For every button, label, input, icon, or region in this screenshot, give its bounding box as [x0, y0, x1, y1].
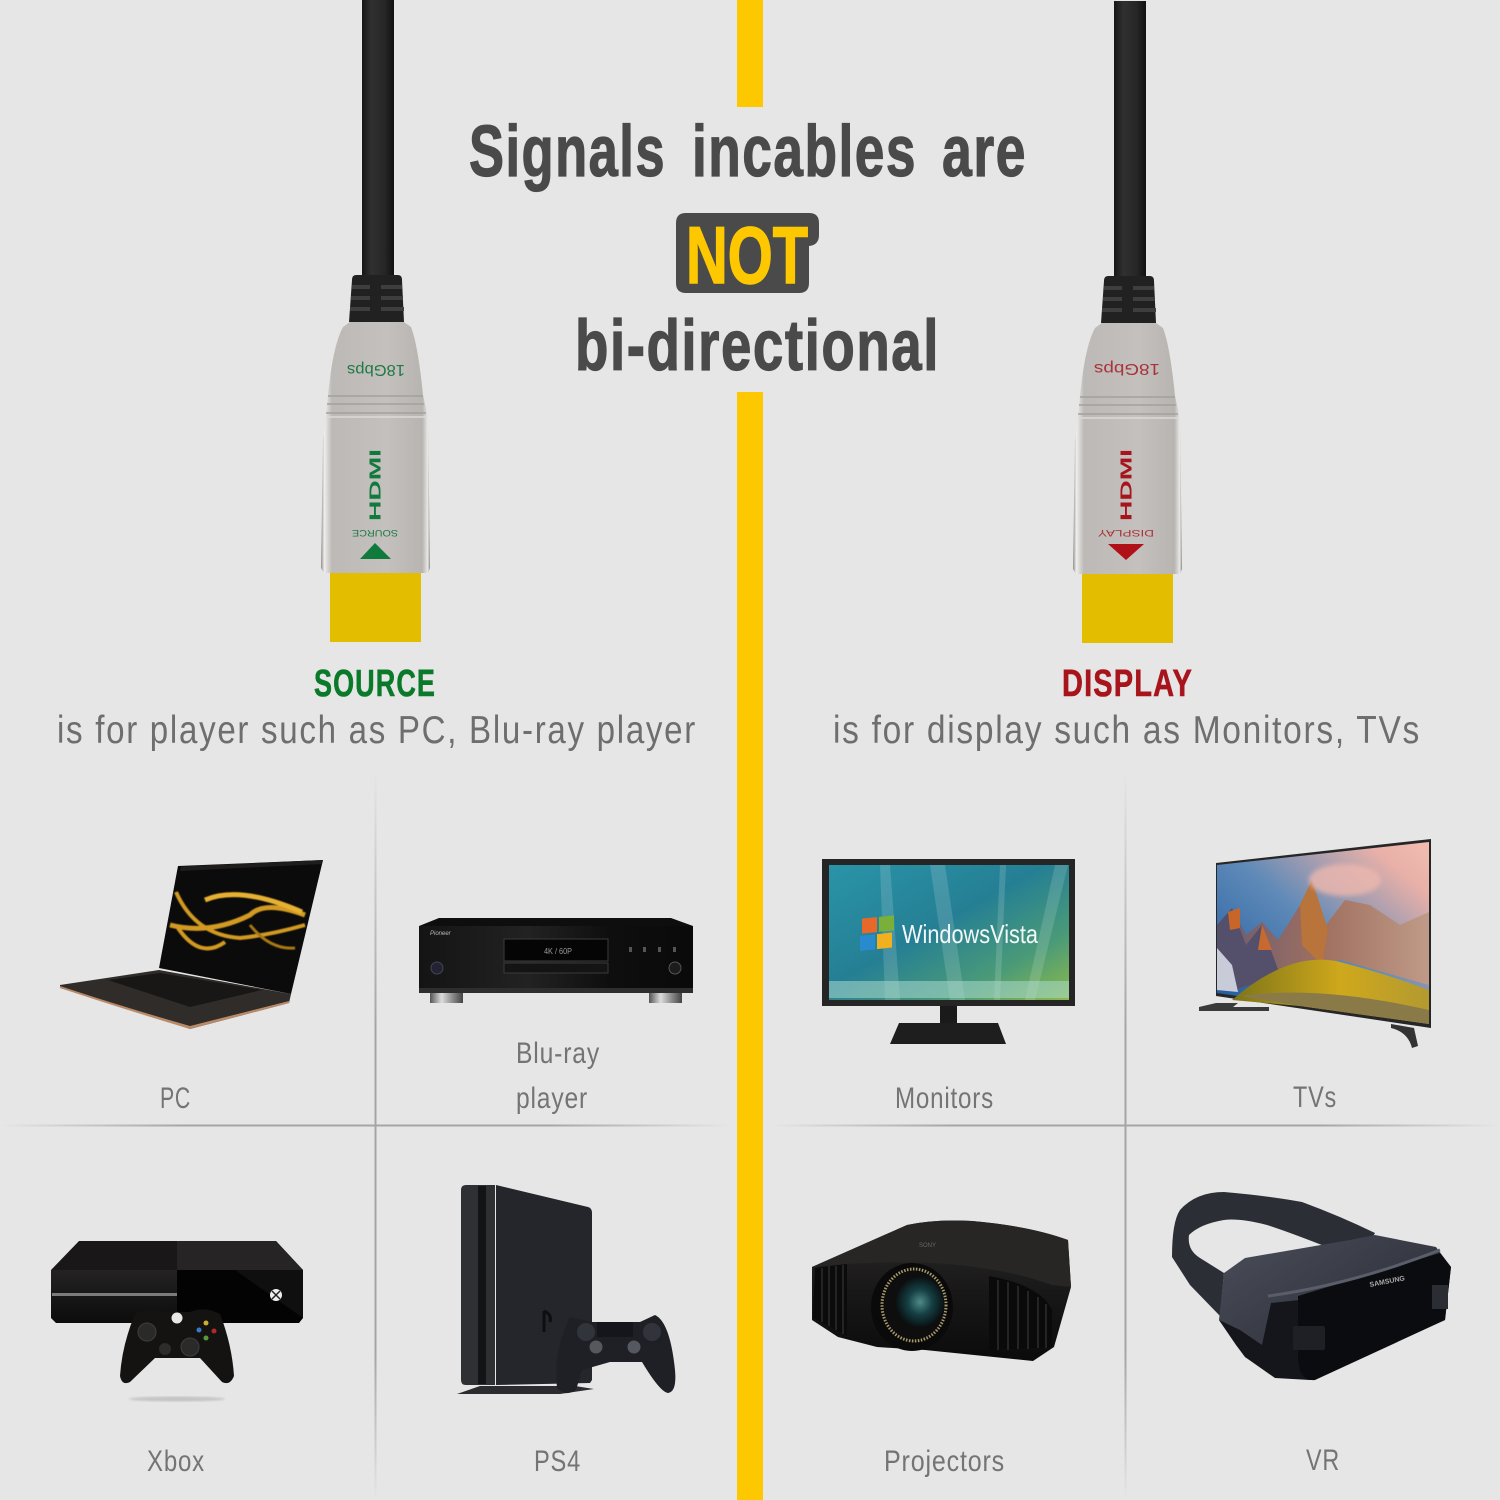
lens	[871, 1263, 953, 1351]
title line 1: Signals	[469, 112, 666, 192]
shadow	[129, 1396, 225, 1402]
clip	[1293, 1326, 1325, 1350]
brand: SAMSUNG	[1369, 1275, 1406, 1289]
NOT badge: NOT	[686, 211, 808, 301]
label PS4: PS4	[534, 1445, 581, 1478]
center yellow divider	[737, 0, 763, 1500]
icon: projector	[812, 1220, 1071, 1361]
label PC: PC	[160, 1082, 191, 1115]
icon: monitor	[822, 859, 1075, 1044]
label Blu-ray player: Blu-ray	[516, 1037, 600, 1070]
display heading: DISPLAY	[1062, 663, 1193, 705]
label VR: VR	[1306, 1444, 1340, 1477]
source label small: SOURCE	[352, 528, 398, 538]
stand	[940, 1006, 957, 1030]
device labels	[147, 1037, 1340, 1478]
disc slot	[52, 1293, 177, 1296]
title line 1	[469, 112, 1027, 192]
left vents	[813, 1264, 847, 1336]
front visor	[1298, 1253, 1451, 1380]
speed label: 18Gbps	[1094, 360, 1160, 377]
HDMI logo: HDMI	[1118, 449, 1136, 521]
icon: VR headset	[1172, 1192, 1451, 1380]
label Blu-ray player	[516, 1037, 600, 1115]
source description: is for player such as PC, Blu-ray player	[57, 709, 697, 752]
icon: TV	[1199, 839, 1431, 1048]
red arrow	[1108, 544, 1144, 560]
playstation logo	[544, 1311, 550, 1332]
icon: blu-ray player	[419, 918, 693, 1003]
source HDMI connector	[321, 0, 430, 642]
label TVs: TVs	[1293, 1081, 1337, 1114]
green arrow	[360, 543, 391, 559]
HDMI logo: HDMI	[368, 449, 384, 521]
right vents	[989, 1276, 1052, 1350]
title line 1: are	[942, 112, 1027, 192]
icon: Xbox console	[51, 1241, 303, 1402]
brand: Pioneer	[430, 931, 452, 937]
feet	[430, 993, 463, 1003]
monitor screen	[829, 865, 1069, 1000]
disc display	[504, 939, 608, 961]
display description: is for display such as Monitors, TVs	[833, 709, 1421, 752]
body	[1219, 1235, 1451, 1380]
xbox logo	[270, 1289, 282, 1301]
icon: laptop	[60, 860, 323, 1029]
PS4 controller	[556, 1315, 675, 1393]
lower side shade	[1219, 1300, 1310, 1380]
label Monitors: Monitors	[895, 1082, 994, 1115]
title	[469, 112, 1027, 386]
speed label: 18Gbps	[347, 361, 405, 378]
icon: blu-ray player: 4K / 60P	[544, 947, 572, 956]
source heading: SOURCE	[314, 663, 436, 705]
icon: monitor: WindowsVista	[902, 919, 1038, 949]
label Xbox: Xbox	[147, 1445, 205, 1478]
strap	[1172, 1192, 1375, 1316]
icon: PS4 console	[457, 1185, 675, 1394]
label Projectors: Projectors	[884, 1445, 1005, 1478]
label Blu-ray player: player	[516, 1082, 588, 1115]
brand: SONY	[919, 1243, 936, 1249]
display HDMI connector	[1073, 1, 1182, 643]
display label small: DISPLAY	[1098, 528, 1154, 538]
TV screen	[1217, 842, 1429, 1024]
knobs	[431, 962, 443, 974]
title line 3: bi-directional	[575, 307, 940, 386]
title line 1: incables	[692, 112, 917, 192]
controller	[120, 1309, 234, 1383]
windows logo	[860, 915, 894, 951]
